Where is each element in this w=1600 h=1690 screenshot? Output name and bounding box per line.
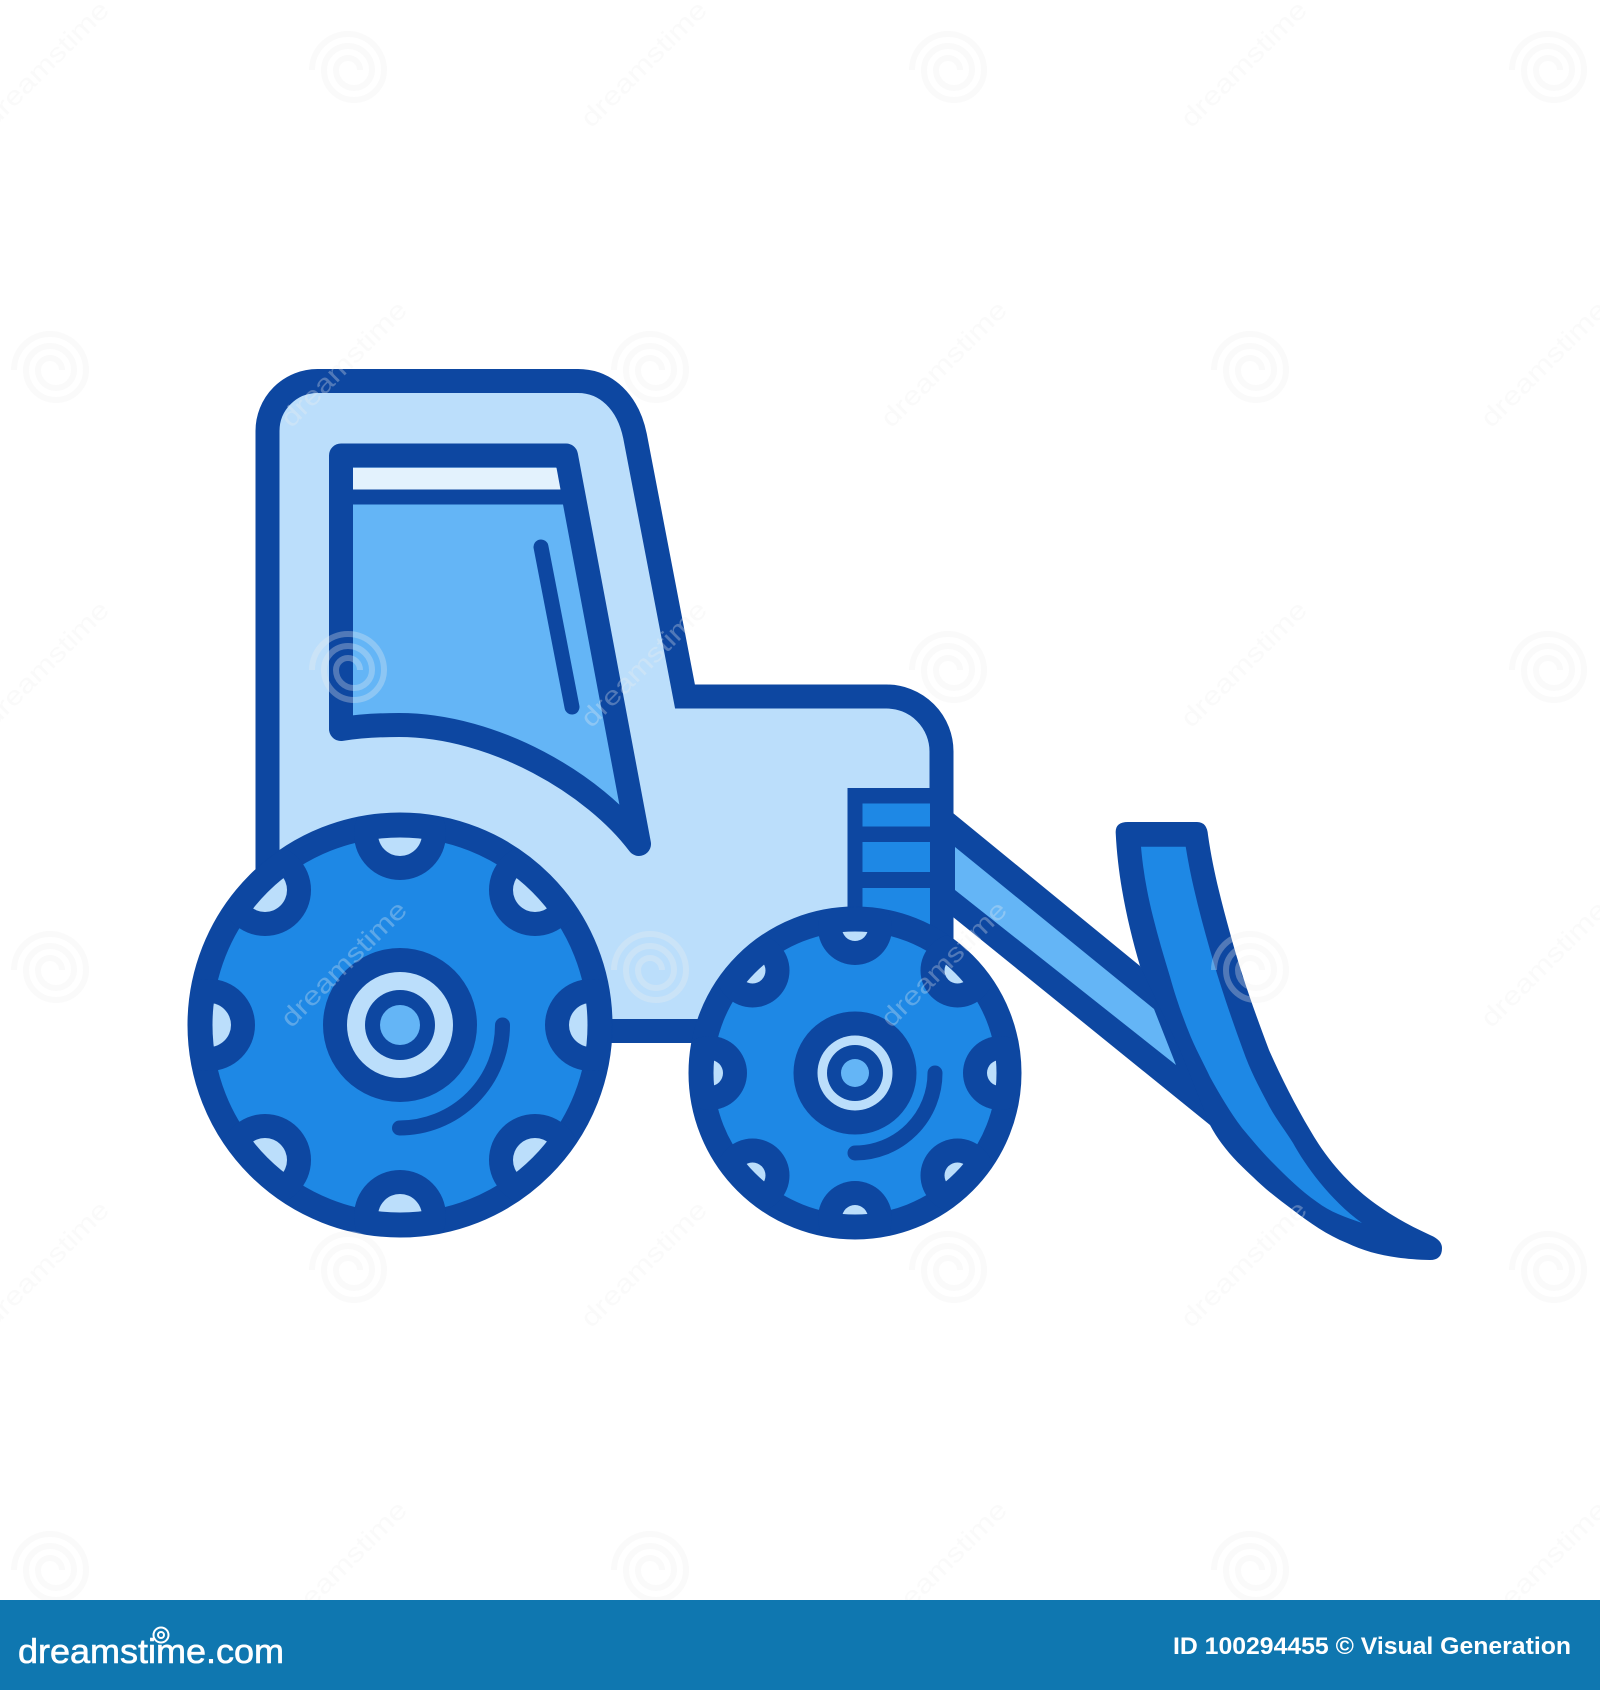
watermark overlay: dreamstime bbox=[574, 594, 713, 733]
cab window bbox=[341, 456, 639, 844]
footer logo text: dreamstime.com bbox=[18, 1633, 284, 1671]
watermark overlay: dreamstime bbox=[274, 294, 413, 433]
watermark overlay: dreamstime bbox=[274, 1494, 413, 1633]
rear wheel bbox=[188, 812, 612, 1238]
watermark overlay: dreamstime bbox=[874, 1494, 1013, 1633]
watermark overlay: dreamstime bbox=[574, 1194, 713, 1333]
tractor cab and hood body bbox=[268, 381, 942, 1031]
watermark overlay: dreamstime bbox=[1474, 894, 1600, 1033]
loader blade bbox=[1116, 822, 1442, 1260]
watermark overlay: dreamstime bbox=[1474, 1494, 1600, 1633]
watermark overlay: dreamstime bbox=[874, 894, 1013, 1033]
watermark overlay: dreamstime bbox=[1174, 1194, 1313, 1333]
watermark overlay: dreamstime bbox=[1174, 0, 1313, 133]
watermark overlay: dreamstime bbox=[274, 894, 413, 1033]
front wheel hub bbox=[794, 1012, 916, 1134]
watermark overlay: dreamstime bbox=[874, 294, 1013, 433]
watermark overlay: dreamstime bbox=[574, 0, 713, 133]
rear wheel lugs bbox=[212, 838, 588, 1212]
front wheel lugs bbox=[714, 932, 996, 1214]
footer bar bbox=[0, 1600, 1600, 1690]
rear wheel hub bbox=[323, 948, 477, 1102]
image credit: ID 100294455 © Visual Generation bbox=[1173, 1633, 1571, 1660]
watermark overlay: dreamstime bbox=[1474, 294, 1600, 433]
watermark overlay: dreamstime bbox=[1174, 594, 1313, 733]
loader arm bbox=[953, 813, 1225, 1125]
front wheel bbox=[688, 906, 1022, 1240]
icon: logo spiral bbox=[154, 1628, 168, 1642]
icon: tractor loader bbox=[163, 381, 1442, 1262]
front bracket bbox=[848, 780, 953, 980]
